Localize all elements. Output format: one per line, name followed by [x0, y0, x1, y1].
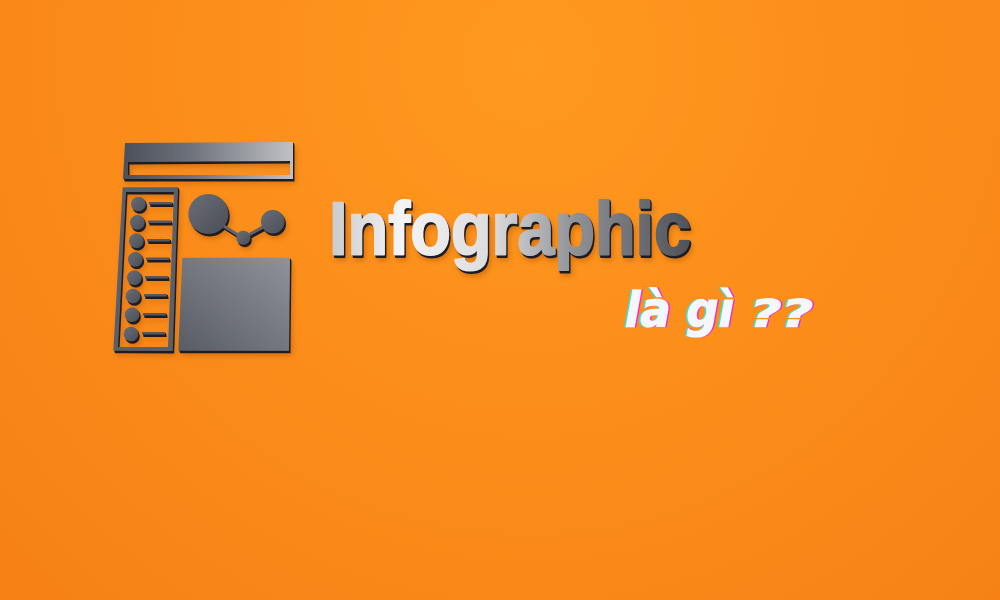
subtitle: là gì ??: ?? — [750, 292, 813, 336]
title: Infographic: Infographic — [329, 186, 691, 270]
list frame — [113, 187, 178, 351]
icon: infographic layout logo — [113, 142, 293, 351]
solid square panel — [178, 258, 290, 351]
subtitle: là gì ?? — [625, 282, 813, 338]
network graph icon — [188, 194, 285, 245]
header bar with window — [123, 142, 293, 179]
list lines — [142, 202, 172, 334]
list bullets — [124, 197, 146, 341]
subtitle: là gì ??: là gì — [625, 282, 734, 338]
